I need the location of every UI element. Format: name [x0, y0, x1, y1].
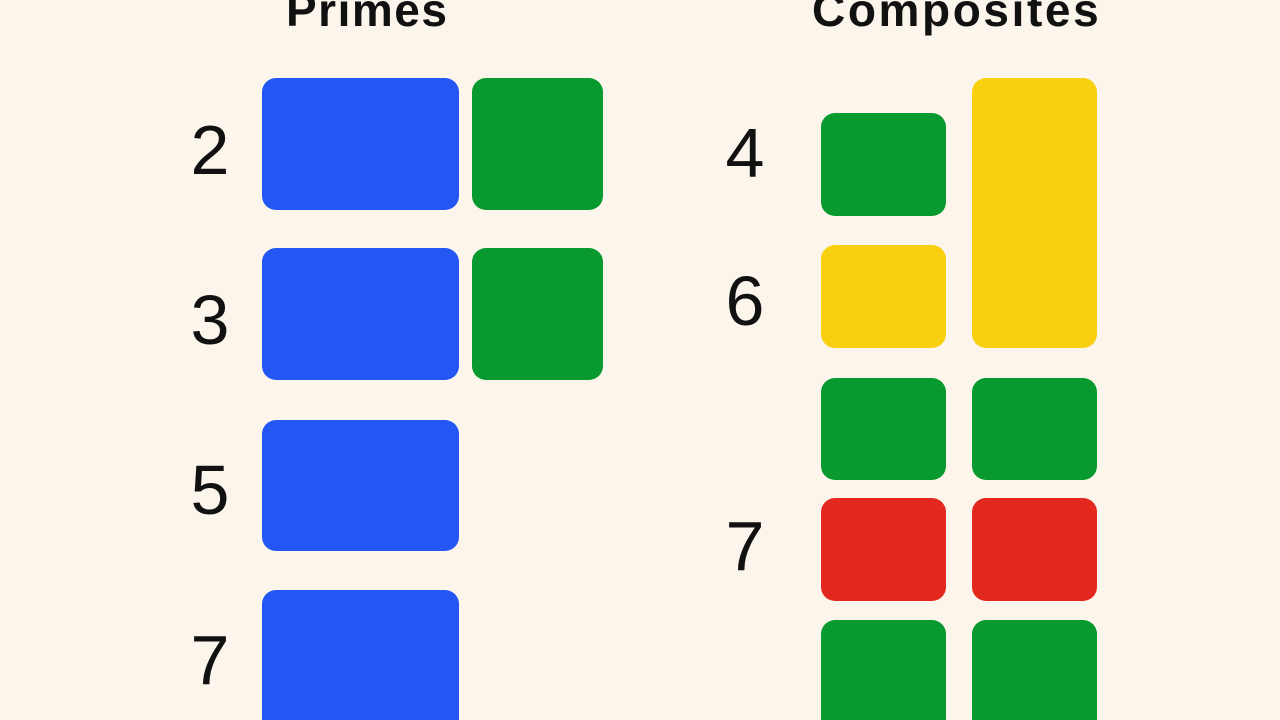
block: bottom green left	[821, 620, 946, 720]
panel: composites	[726, 78, 1097, 720]
block: 3 green	[472, 248, 603, 380]
block: 3 blue	[262, 248, 459, 380]
block: 2 blue	[262, 78, 459, 210]
number 2: 2	[191, 111, 229, 189]
block: 5 blue	[262, 420, 459, 551]
number 7: 7	[726, 507, 764, 585]
number 3: 3	[191, 281, 229, 359]
block: 6 yellow	[821, 245, 946, 348]
panel: primes	[191, 78, 603, 720]
number 7: 7	[191, 621, 229, 699]
number 5: 5	[191, 451, 229, 529]
block: tall yellow	[972, 78, 1097, 348]
block: 4 green	[821, 113, 946, 216]
number 6: 6	[726, 262, 764, 340]
block: red right	[972, 498, 1097, 601]
block: 2 green	[472, 78, 603, 210]
block: green left	[821, 378, 946, 480]
number 4: 4	[726, 114, 764, 192]
block: red left	[821, 498, 946, 601]
block: 7 blue	[262, 590, 459, 720]
block: bottom green right	[972, 620, 1097, 720]
block: green right	[972, 378, 1097, 480]
